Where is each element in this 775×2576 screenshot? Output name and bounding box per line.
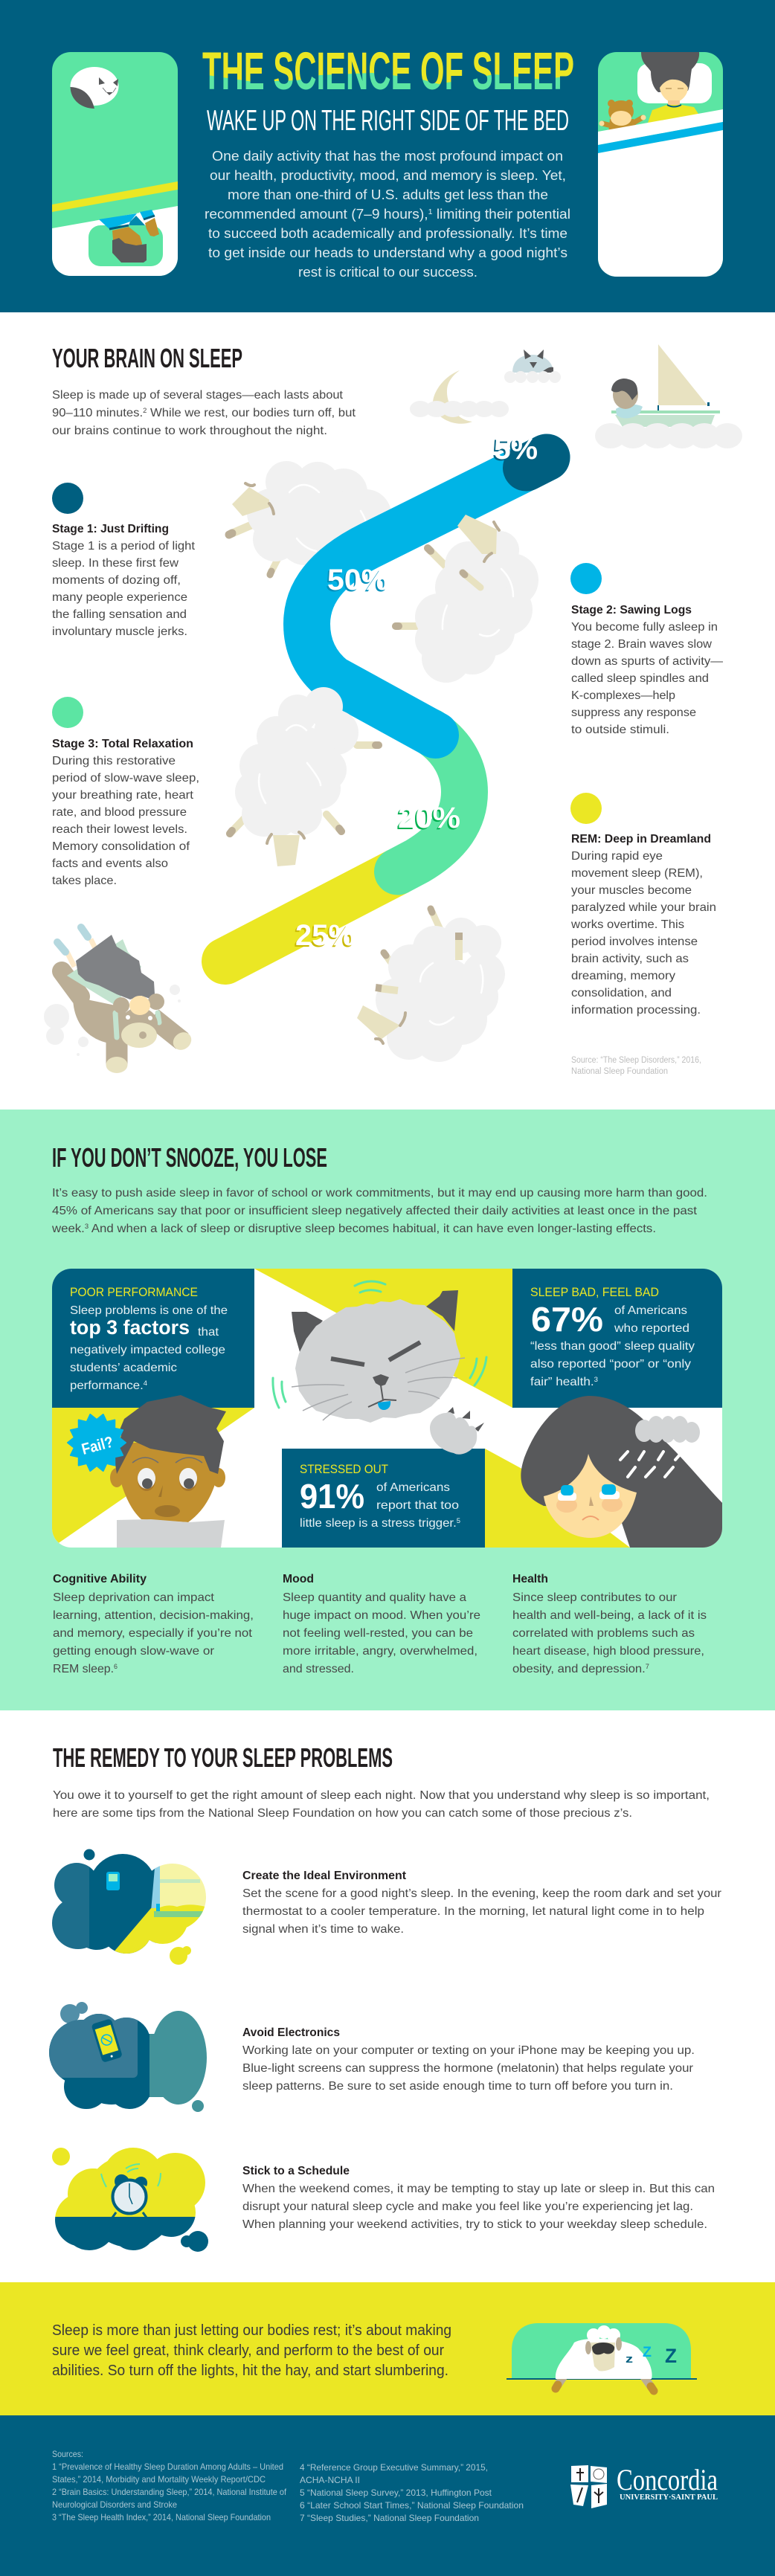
stage 3 block bbox=[52, 697, 199, 887]
stage 1 block: the falling sensation and bbox=[52, 608, 187, 621]
label: 20 percent: 20% bbox=[398, 802, 460, 834]
illustration: left bed card bbox=[52, 52, 178, 276]
column: health: correlated with problems such as bbox=[512, 1627, 695, 1640]
stage 1 block: Stage 1: Just Drifting bbox=[52, 523, 169, 535]
tip: stick to a schedule bbox=[242, 2165, 715, 2231]
stage 1 block: involuntary muscle jerks. bbox=[52, 625, 187, 638]
illustration: sheep right of band bbox=[396, 515, 538, 683]
column: cognitive ability: learning, attention, decision-making, bbox=[53, 1609, 254, 1622]
REM block: dreaming, memory bbox=[571, 970, 675, 982]
illustration: right bed card bbox=[598, 52, 723, 277]
sources: 2 “Brain Basics: Understanding Sleep,” 2014, National Institute of bbox=[52, 2487, 287, 2497]
source note: Source: “The Sleep Disorders,” 2016, bbox=[571, 1056, 701, 1065]
stage 2 block: to outside stimuli. bbox=[571, 724, 669, 736]
REM block: period involves intense bbox=[571, 936, 698, 948]
closing text bbox=[52, 2322, 451, 2379]
section intro bbox=[53, 1789, 710, 1820]
sources: Sources: bbox=[52, 2449, 83, 2459]
text: stressed out: little sleep is a stress trigger. bbox=[300, 1517, 449, 1530]
REM block: information processing. bbox=[571, 1004, 701, 1017]
section intro: And when a lack of sleep or disruptive sleep becomes habitual, it can have even longer-lasting effects. bbox=[89, 1223, 656, 1235]
column: cognitive ability bbox=[53, 1573, 254, 1675]
tip: create the ideal environment: signal when it’s time to wake. bbox=[242, 1923, 404, 1936]
stage 1 block: many people experience bbox=[52, 591, 187, 604]
REM block: During rapid eye bbox=[571, 850, 663, 863]
intro paragraph: more than one-third of U.S. adults get less than the bbox=[228, 187, 548, 202]
text: stressed out bbox=[300, 1462, 460, 1530]
text: stressed out: of Americans bbox=[376, 1481, 450, 1494]
text: sleep bad feel bad: of Americans bbox=[614, 1304, 687, 1317]
REM block: paralyzed while your brain bbox=[571, 901, 716, 914]
illustration: sheep bottom right bbox=[357, 909, 505, 1062]
text: sleep bad feel bad: who reported bbox=[614, 1322, 689, 1335]
sources: 1 “Prevalence of Healthy Sleep Duration Among Adults – United bbox=[52, 2461, 283, 2472]
text: poor performance: students’ academic bbox=[70, 1362, 177, 1374]
sources: 4 “Reference Group Executive Summary,” 2015, bbox=[300, 2462, 488, 2473]
column: cognitive ability: and memory, especially if you’re not bbox=[53, 1627, 253, 1640]
section intro: here are some tips from the National Sleep Foundation on how you can catch some of those precious z’s. bbox=[53, 1807, 632, 1820]
column: mood: Sleep quantity and quality have a bbox=[283, 1591, 466, 1604]
tip: avoid electronics: Working late on your computer or texting on your iPhone may be keeping you up. bbox=[242, 2044, 695, 2057]
column: health: 7 bbox=[646, 1663, 649, 1670]
stage 3 block: reach their lowest levels. bbox=[52, 823, 187, 836]
column: cognitive ability: REM sleep. bbox=[53, 1663, 115, 1675]
stage 2 block: down as spurts of activity— bbox=[571, 655, 723, 668]
intro paragraph: to get inside our heads to understand why a good night’s bbox=[208, 245, 567, 260]
tip: create the ideal environment: thermostat to a cooler temperature. In the morning, let natural light come in to help bbox=[242, 1905, 704, 1918]
column: cognitive ability: Sleep deprivation can impact bbox=[53, 1591, 215, 1604]
text: sleep bad feel bad bbox=[530, 1285, 695, 1388]
section intro: Sleep is made up of several stages—each lasts about bbox=[52, 389, 344, 402]
column: mood bbox=[283, 1573, 480, 1675]
sources: Neurological Disorders and Stroke bbox=[52, 2499, 177, 2510]
stage 3 block: facts and events also bbox=[52, 857, 168, 870]
tip: create the ideal environment: Set the scene for a good night’s sleep. In the evening, keep the room dark and set your bbox=[242, 1887, 722, 1900]
text: stressed out: 91% bbox=[300, 1477, 364, 1516]
text: sleep bad feel bad: 67% bbox=[531, 1300, 603, 1339]
text: sleep bad feel bad: also reported “poor” or “only bbox=[530, 1358, 691, 1371]
tip: avoid electronics: Blue-light screens can suppress the hormone (melatonin) that helps regulate your bbox=[242, 2062, 694, 2075]
column: mood: Mood bbox=[283, 1573, 314, 1585]
intro paragraph: recommended amount (7–9 hours), bbox=[205, 207, 414, 222]
sources bbox=[52, 2449, 524, 2523]
section intro: While we rest, our bodies turn off, but bbox=[147, 407, 356, 419]
icon: bedroom thought cloud bbox=[45, 1844, 208, 1965]
column: mood: not feeling well-rested, you can be bbox=[283, 1627, 473, 1640]
stage 2 block: K-complexes—help bbox=[571, 689, 675, 702]
stage 2 block bbox=[570, 563, 723, 736]
section intro: 90–110 minutes. bbox=[52, 407, 139, 419]
text: sleep bad feel bad: “less than good” sleep quality bbox=[530, 1340, 695, 1353]
tip: stick to a schedule: When planning your weekend activities, try to stick to your weekday sleep schedule. bbox=[242, 2218, 707, 2231]
section intro bbox=[52, 389, 356, 437]
illustration: girl hugging teddy bear bbox=[44, 927, 195, 1073]
icon: no phone thought cloud bbox=[45, 2002, 209, 2112]
text: poor performance: Sleep problems is one of the bbox=[70, 1304, 228, 1317]
tip: create the ideal environment: Create the Ideal Environment bbox=[242, 1870, 407, 1882]
sources: States,” 2014, Morbidity and Mortality Weekly Report/CDC bbox=[52, 2474, 266, 2485]
text: poor performance bbox=[70, 1285, 228, 1392]
column: health: Health bbox=[512, 1573, 548, 1585]
illustration: cat on cloud bbox=[504, 350, 561, 383]
stage 1 block bbox=[52, 483, 196, 638]
tip: stick to a schedule: disrupt your natural sleep cycle and make you feel like you’re experiencing jet lag. bbox=[242, 2200, 693, 2213]
stage 3 block: During this restorative bbox=[52, 755, 176, 767]
intro paragraph: rest is critical to our success. bbox=[298, 265, 477, 280]
text: sleep bad feel bad: 3 bbox=[594, 1376, 598, 1383]
chart: sleep stage winding band bbox=[225, 433, 547, 961]
footer bbox=[0, 2415, 775, 2576]
icon: REM marker bbox=[570, 793, 602, 824]
stage 2 block: stage 2. Brain waves slow bbox=[571, 638, 712, 651]
column: cognitive ability: Cognitive Ability bbox=[53, 1573, 147, 1585]
text: poor performance: performance. bbox=[70, 1379, 140, 1392]
stage 1 block: moments of dozing off, bbox=[52, 574, 181, 587]
closing text: abilities. So turn off the lights, hit the hay, and start slumbering. bbox=[52, 2363, 448, 2379]
stage 1 block: sleep. In these first few bbox=[52, 557, 179, 570]
illustration: sleeping sheep: z bbox=[626, 2353, 633, 2366]
text: sleep bad feel bad: fair” health. bbox=[530, 1376, 590, 1388]
REM block bbox=[570, 793, 716, 1017]
header band bbox=[0, 0, 775, 312]
column: mood: and stressed. bbox=[283, 1663, 354, 1675]
illustration: sheep left lower bbox=[230, 687, 379, 866]
panel: the remedy bbox=[49, 1748, 721, 2252]
intro paragraph: limiting their potential bbox=[433, 207, 570, 222]
illustration: boy on sailboat on cloud bbox=[595, 344, 742, 448]
REM block: consolidation, and bbox=[571, 987, 672, 999]
heading: THE REMEDY TO YOUR SLEEP PROBLEMS bbox=[53, 1742, 393, 1773]
text: poor performance: negatively impacted college bbox=[70, 1344, 225, 1356]
collage panel bbox=[52, 1269, 725, 1548]
column: mood: more irritable, angry, overwhelmed, bbox=[283, 1645, 477, 1658]
column: health: health and well-being, a lack of it is bbox=[512, 1609, 707, 1622]
icon: curled fox bbox=[70, 67, 119, 109]
illustration: grumpy cat bbox=[273, 1281, 486, 1423]
text: poor performance: 4 bbox=[144, 1379, 147, 1387]
REM block: movement sleep (REM), bbox=[571, 867, 703, 880]
text: poor performance: top 3 factors bbox=[70, 1316, 190, 1339]
section intro: our brains continue to work throughout the night. bbox=[52, 425, 327, 437]
text: stressed out: report that too bbox=[376, 1499, 459, 1512]
column: health: heart disease, high blood pressure, bbox=[512, 1645, 704, 1658]
intro paragraph: One daily activity that has the most profound impact on bbox=[212, 149, 563, 164]
text: stressed out: STRESSED OUT bbox=[300, 1462, 388, 1476]
section intro bbox=[51, 1187, 707, 1235]
stage 2 block: suppress any response bbox=[571, 706, 696, 719]
REM block: REM: Deep in Dreamland bbox=[571, 833, 711, 846]
illustration: sleeping sheep: Z bbox=[665, 2345, 677, 2367]
section intro: 45% of Americans say that poor or insufficient sleep negatively affected their daily activities at least once in the past bbox=[52, 1205, 698, 1217]
column: mood: huge impact on mood. When you’re bbox=[283, 1609, 480, 1622]
sources: 7 “Sleep Studies,” National Sleep Foundation bbox=[300, 2513, 479, 2523]
tip: stick to a schedule: When the weekend comes, it may be tempting to stay up late or sleep in. But this can bbox=[242, 2183, 715, 2195]
intro paragraph: to succeed both academically and professionally. It’s time bbox=[208, 226, 567, 241]
label: 5 percent: 5% bbox=[494, 433, 538, 466]
icon: alarm clock thought cloud bbox=[52, 2148, 208, 2252]
column: health bbox=[512, 1573, 707, 1675]
illustration: sleeping sheep: Z bbox=[643, 2345, 652, 2360]
panel: closing banner bbox=[0, 2282, 775, 2415]
label: 25 percent: 25% bbox=[295, 919, 355, 952]
REM block: your muscles become bbox=[571, 884, 692, 897]
intro paragraph bbox=[205, 149, 570, 280]
heading: IF YOU DON’T SNOOZE, YOU LOSE bbox=[52, 1142, 327, 1173]
section intro: It’s easy to push aside sleep in favor of school or work commitments, but it may end up causing more harm than good. bbox=[52, 1187, 707, 1200]
stage 3 block: rate, and blood pressure bbox=[52, 806, 187, 819]
sources: 3 “The Sleep Health Index,” 2014, National Sleep Foundation bbox=[52, 2512, 271, 2522]
stage 2 block: Stage 2: Sawing Logs bbox=[571, 604, 692, 616]
tip: stick to a schedule: Stick to a Schedule bbox=[242, 2165, 350, 2177]
icon: stage 1 marker bbox=[52, 483, 83, 514]
column: health: obesity, and depression. bbox=[512, 1663, 640, 1675]
stage 1 block: Stage 1 is a period of light bbox=[52, 540, 196, 553]
source note bbox=[571, 1056, 701, 1076]
logo: Concordia University Saint Paul: Concordia bbox=[617, 2463, 718, 2496]
illustration: crying girl bbox=[521, 1396, 725, 1548]
logo: Concordia University Saint Paul: UNIVERSITY·SAINT PAUL bbox=[620, 2493, 718, 2502]
icon: stage 3 marker bbox=[52, 697, 83, 728]
heading: YOUR BRAIN ON SLEEP bbox=[52, 343, 242, 373]
closing text: sure we feel great, think clearly, and perform to the best of our bbox=[52, 2342, 444, 2359]
tip: avoid electronics: Avoid Electronics bbox=[242, 2026, 340, 2039]
closing text: Sleep is more than just letting our bodies rest; it’s about making bbox=[52, 2322, 451, 2339]
column: cognitive ability: 6 bbox=[114, 1663, 118, 1670]
panel: if you don't snooze bbox=[0, 1110, 775, 1710]
REM block: works overtime. This bbox=[570, 918, 684, 931]
intro paragraph: our health, productivity, mood, and memory is sleep. Yet, bbox=[210, 168, 566, 183]
illustration: moon and clouds bbox=[410, 370, 509, 424]
section intro: week. bbox=[52, 1223, 83, 1235]
source note: National Sleep Foundation bbox=[571, 1067, 668, 1076]
text: poor performance: that bbox=[198, 1326, 219, 1339]
stage 2 block: called sleep spindles and bbox=[571, 672, 709, 685]
stage 3 block: takes place. bbox=[52, 875, 117, 887]
column: health: Since sleep contributes to our bbox=[512, 1591, 678, 1604]
illustration: cat paw bbox=[430, 1407, 484, 1455]
stage 3 block: Memory consolidation of bbox=[52, 840, 190, 853]
section intro: 2 bbox=[143, 407, 147, 414]
tip: avoid electronics: sleep patterns. Be sure to set aside enough time to turn off before you turn in. bbox=[242, 2080, 673, 2093]
icon: fail burst: Fail? bbox=[80, 1434, 115, 1458]
section intro: 3 bbox=[85, 1223, 89, 1230]
sources: ACHA-NCHA II bbox=[300, 2475, 360, 2485]
icon: fail burst bbox=[68, 1414, 126, 1471]
illustration: sleeping sheep bbox=[507, 2323, 697, 2391]
text: poor performance: POOR PERFORMANCE bbox=[70, 1285, 198, 1299]
stage 3 block: Stage 3: Total Relaxation bbox=[52, 738, 193, 750]
section intro: You owe it to yourself to get the right amount of sleep each night. Now that you understand why sleep is so important, bbox=[53, 1789, 710, 1802]
label: 50 percent: 50% bbox=[327, 564, 388, 596]
text: stressed out: 5 bbox=[457, 1517, 460, 1524]
illustration: sheep top left bbox=[229, 461, 391, 575]
panel: your brain on sleep bbox=[0, 312, 775, 1110]
REM block: brain activity, such as bbox=[571, 953, 689, 965]
text: sleep bad feel bad: SLEEP BAD, FEEL BAD bbox=[530, 1285, 659, 1299]
stage 3 block: your breathing rate, heart bbox=[52, 789, 194, 802]
sources: 6 “Later School Start Times,” National Sleep Foundation bbox=[300, 2500, 524, 2511]
tip: create the ideal environment bbox=[242, 1870, 722, 1936]
illustration: boy bbox=[110, 1395, 226, 1548]
intro paragraph: 1 bbox=[428, 208, 433, 216]
icon: stage 2 marker bbox=[570, 563, 602, 594]
column: cognitive ability: getting enough slow-wave or bbox=[53, 1645, 215, 1658]
stage 3 block: period of slow-wave sleep, bbox=[52, 772, 199, 785]
logo: Concordia University Saint Paul bbox=[570, 2463, 718, 2508]
stage 2 block: You become fully asleep in bbox=[571, 621, 718, 634]
tip: avoid electronics bbox=[242, 2026, 695, 2093]
sources: 5 “National Sleep Survey,” 2013, Huffington Post bbox=[300, 2488, 492, 2498]
